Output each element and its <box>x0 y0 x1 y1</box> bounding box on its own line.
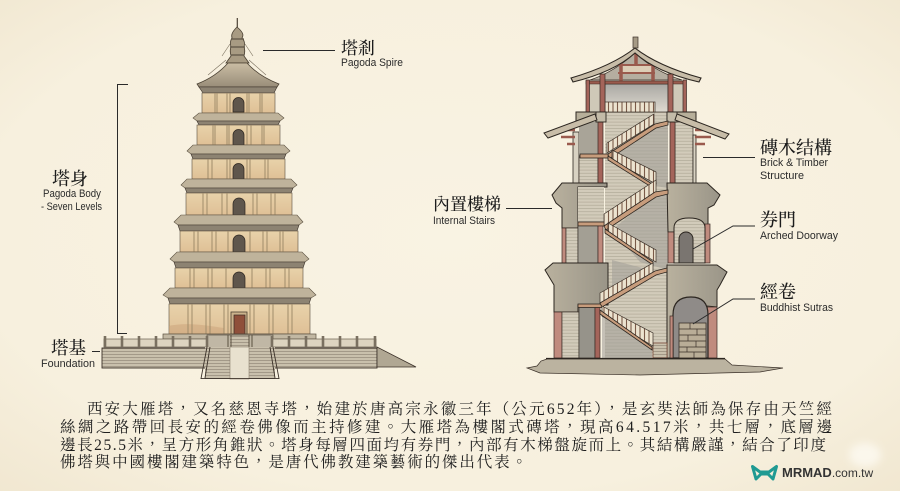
stair flight 2 <box>608 150 656 188</box>
logo: MRMAD <box>752 465 874 480</box>
description paragraph: 西安大雁塔，又名慈恩寺塔，始建於唐高宗永徽三年（公元652年），是玄奘法師為保存由天竺經 <box>87 399 832 418</box>
label: pagoda spire <box>341 39 403 69</box>
roof 2 <box>170 252 309 268</box>
label: buddhist sutras <box>760 282 833 314</box>
brick section below left floor <box>578 187 608 226</box>
pagoda spire <box>208 18 266 75</box>
upper room <box>589 84 684 112</box>
label: brick and timber structure: 磚木结構 <box>760 138 832 158</box>
label: buddhist sutras: Buddhist Sutras <box>760 302 833 314</box>
label: brick and timber structure: Brick & Timber <box>760 157 828 169</box>
upper storey walls <box>544 112 729 183</box>
logo mark <box>752 466 776 479</box>
logo wordmark: MRMAD.com.tw <box>782 465 874 480</box>
stairs shadows <box>602 124 668 358</box>
roof 1 <box>163 288 316 304</box>
level 4 <box>186 193 292 215</box>
leader: brick and timber <box>703 156 755 158</box>
label: brick and timber structure: Structure <box>760 170 804 182</box>
label: pagoda spire: Pagoda Spire <box>341 57 403 69</box>
label: internal stairs: 內置樓梯 <box>433 195 501 214</box>
ground storey walls <box>554 304 717 358</box>
arched doorway <box>674 218 705 263</box>
label: pagoda spire: 塔剎 <box>341 39 375 58</box>
roof 5 <box>187 145 290 159</box>
label: foundation <box>41 338 100 370</box>
description paragraph: 絲綢之路帶回長安的經卷佛像而主持修建。大雁塔為樓閣式磚塔，現高64.517米，共七層，底層邊 <box>60 417 832 436</box>
floor block right lower <box>667 265 727 358</box>
leader: internal stairs <box>506 208 552 210</box>
description paragraph: 邊長25.5米，呈方形角錐狀。塔身每層四面均有券門，內部有木梯盤旋而上。其結構嚴謹，結合了印度 <box>60 436 826 454</box>
label: foundation: Foundation <box>41 358 95 370</box>
floor block right upper <box>667 183 720 232</box>
top roof <box>197 63 279 93</box>
label: pagoda body <box>41 169 102 213</box>
leader: buddhist sutras <box>693 299 755 324</box>
description paragraph: 佛塔與中國樓閣建築特色，是唐代佛教建築藝術的傑出代表。 <box>60 452 527 471</box>
label: foundation: 塔基 <box>51 338 86 358</box>
label: buddhist sutras: 經卷 <box>760 282 796 302</box>
label: internal stairs <box>433 195 501 227</box>
label: pagoda body: - Seven Levels <box>41 201 102 213</box>
floor block left lower <box>545 263 608 312</box>
label: internal stairs: Internal Stairs <box>433 215 495 227</box>
floor block left upper <box>552 183 607 228</box>
leader: arched doorway <box>693 226 755 249</box>
bracket: pagoda body <box>118 84 128 334</box>
level 6 <box>197 125 280 145</box>
level 1 with entrance <box>169 304 310 334</box>
stair flight 6 <box>600 306 653 350</box>
stair flight 5 <box>600 263 667 307</box>
ground line <box>546 358 725 360</box>
stair flight 4 <box>605 223 656 265</box>
level 5 <box>192 159 285 179</box>
leader: pagoda spire <box>263 50 335 52</box>
label: pagoda body: 塔身 <box>52 169 88 189</box>
middle storey walls <box>562 224 710 263</box>
ground base <box>527 359 783 375</box>
right illustration: pagoda cross-section <box>527 37 783 375</box>
level 3 <box>180 231 298 252</box>
label: arched doorway <box>760 210 838 242</box>
top roof <box>571 37 701 112</box>
label: arched doorway: Arched Doorway <box>760 230 838 242</box>
foundation platform <box>102 334 416 379</box>
sutra chamber <box>670 297 708 358</box>
left illustration: pagoda exterior <box>102 18 416 379</box>
label: brick and timber structure <box>760 138 832 182</box>
stair flight 3 <box>604 180 668 230</box>
description paragraph <box>60 399 832 471</box>
label: pagoda body: Pagoda Body <box>43 188 101 200</box>
roof 6 <box>193 113 284 125</box>
label: arched doorway: 券門 <box>760 210 796 230</box>
level 7 <box>202 93 275 113</box>
central brick shaft <box>605 112 668 358</box>
bottom steps <box>653 343 667 358</box>
level 2 <box>175 268 303 288</box>
roof 4 <box>181 179 297 193</box>
roof 3 <box>174 215 303 231</box>
stair flight 1 <box>607 114 668 159</box>
